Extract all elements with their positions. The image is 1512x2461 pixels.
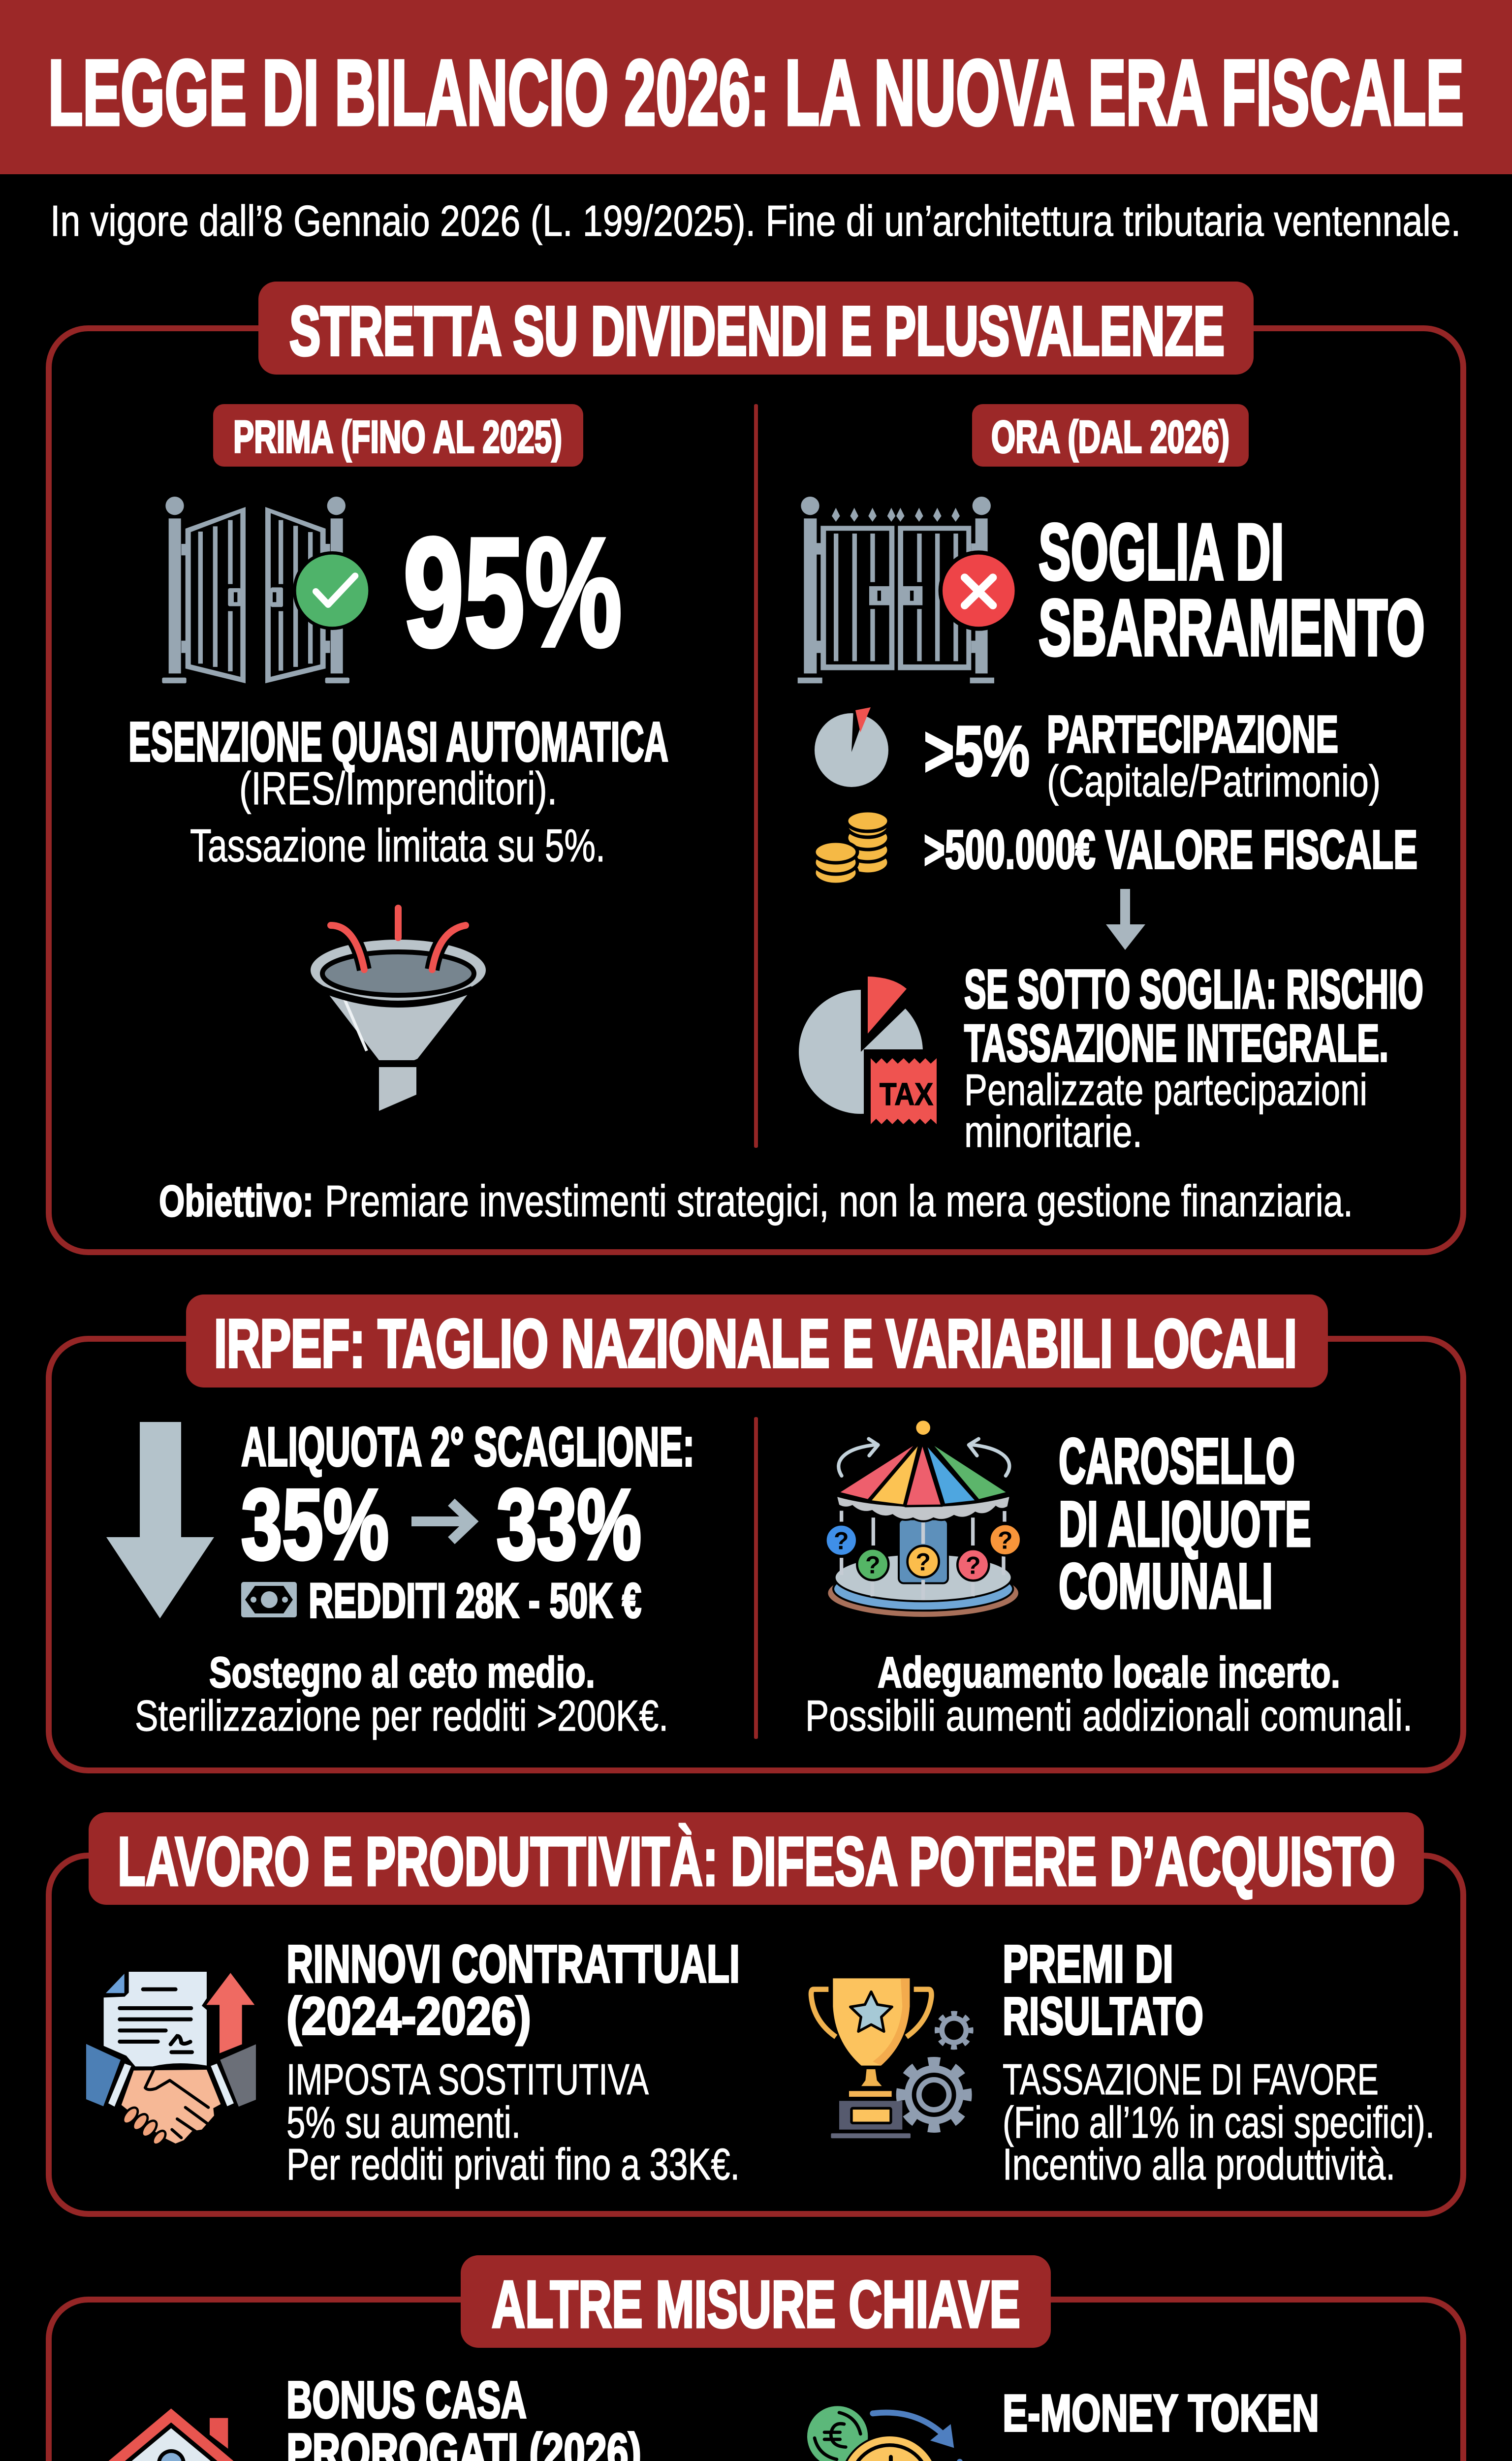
text: partecipazione: >5% <box>924 711 1030 791</box>
text: premi di risultato <box>1003 1934 1435 2189</box>
number 35%: 35% <box>241 1469 389 1580</box>
icon: house with wrench <box>89 2408 253 2461</box>
icon: pie with tax tag: TAX <box>880 1076 933 1112</box>
icon: funnel <box>311 908 486 1111</box>
badge: ora <box>972 404 1249 467</box>
text: bonus casa: BONUS CASA <box>286 2371 527 2429</box>
panel heading: ALTRE MISURE CHIAVE <box>492 2267 1020 2341</box>
text: sostegno: Sostegno al ceto medio. <box>209 1648 595 1697</box>
icon: carousel: ? <box>966 1551 981 1579</box>
text: partecipazione: (Capitale/Patrimonio) <box>1047 757 1381 806</box>
panel heading <box>258 282 1254 375</box>
heading: soglia di sbarramento: SOGLIA DI <box>1039 507 1284 597</box>
text: esenzione quasi automatica: ESENZIONE QUASI AUTOMATICA <box>128 711 668 773</box>
icon: open gate with check <box>162 497 372 683</box>
number 33%: 33% <box>497 1469 641 1580</box>
icon: carousel <box>825 1420 1021 1617</box>
badge: prima <box>213 404 583 467</box>
text: adeguamento <box>805 1648 1413 1740</box>
panel: stretta su dividendi e plusvalenze <box>49 282 1463 1252</box>
text: sostegno <box>135 1648 668 1740</box>
heading: carosello: CAROSELLO <box>1059 1425 1295 1497</box>
panel: irpef <box>49 1294 1463 1770</box>
text: rinnovi contrattuali: (2024-2026) <box>286 1986 531 2046</box>
text: premi di risultato: Incentivo alla produttività. <box>1003 2140 1395 2189</box>
arrow: down <box>1106 889 1145 950</box>
heading: carosello: DI ALIQUOTE <box>1059 1488 1311 1560</box>
icon: handshake and contract <box>86 1972 256 2147</box>
heading: soglia di sbarramento <box>1039 507 1425 672</box>
icon: carousel: ? <box>834 1527 849 1554</box>
heading: carosello: COMUNALI <box>1059 1550 1273 1622</box>
header banner <box>0 0 1512 174</box>
badge: ora: ORA (DAL 2026) <box>991 412 1229 462</box>
text: esenzione quasi automatica: Tassazione limitata su 5%. <box>190 820 605 871</box>
icon: trophy and gears <box>811 1978 971 2138</box>
text: esenzione quasi automatica <box>128 711 668 871</box>
arrow: right <box>411 1502 472 1541</box>
panel: lavoro e produttività <box>49 1812 1463 2214</box>
text: sostegno: Sterilizzazione per redditi >200K€. <box>135 1691 668 1740</box>
icon: coin stacks <box>814 811 889 884</box>
icon: banknote <box>241 1582 297 1617</box>
arrow: big down <box>106 1422 214 1618</box>
text: se sotto soglia: Penalizzate partecipazioni <box>964 1066 1367 1115</box>
text: adeguamento: Adeguamento locale incerto. <box>878 1648 1340 1697</box>
text: premi di risultato: RISULTATO <box>1003 1986 1203 2046</box>
icon: carousel: ? <box>998 1526 1013 1554</box>
text: bonus casa <box>286 2371 747 2461</box>
big number 95%: 95% <box>403 505 622 679</box>
text: se sotto soglia: minoritarie. <box>964 1107 1142 1157</box>
text: rinnovi contrattuali: Per redditi privati fino a 33K€. <box>286 2140 740 2189</box>
text: se sotto soglia <box>964 959 1423 1157</box>
icon: carousel: ? <box>865 1551 881 1578</box>
text: aliquota: ALIQUOTA 2° SCAGLIONE: <box>241 1416 694 1478</box>
panel: altre misure chiave <box>49 2255 1463 2461</box>
icon: pie with tax tag <box>799 977 947 1133</box>
panel heading <box>461 2255 1051 2348</box>
text: premi di risultato: TASSAZIONE DI FAVORE <box>1003 2055 1379 2104</box>
icon: carousel: ? <box>915 1548 931 1576</box>
text: redditi: REDDITI 28K - 50K € <box>309 1573 641 1628</box>
heading: carosello <box>1059 1425 1311 1622</box>
text: rinnovi contrattuali: IMPOSTA SOSTITUTIVA <box>286 2055 649 2104</box>
text: rinnovi contrattuali: RINNOVI CONTRATTUALI <box>286 1934 740 1993</box>
text: e-money token: E-MONEY TOKEN <box>1003 2384 1319 2442</box>
icon: closed gate with cross <box>798 497 1019 683</box>
text: partecipazione: PARTECIPAZIONE <box>1047 705 1338 763</box>
icon: small pie <box>815 707 888 787</box>
text: rinnovi contrattuali: 5% su aumenti. <box>286 2098 521 2147</box>
text: obiettivo: Obiettivo: <box>159 1177 314 1226</box>
icon: euro token conversion <box>807 2406 973 2461</box>
text: esenzione quasi automatica: (IRES/Imprenditori). <box>239 762 557 814</box>
text: premi di risultato: PREMI DI <box>1003 1934 1173 1993</box>
badge: prima: PRIMA (FINO AL 2025) <box>233 412 562 462</box>
text: rinnovi contrattuali <box>286 1934 740 2189</box>
text: partecipazione <box>924 705 1381 806</box>
